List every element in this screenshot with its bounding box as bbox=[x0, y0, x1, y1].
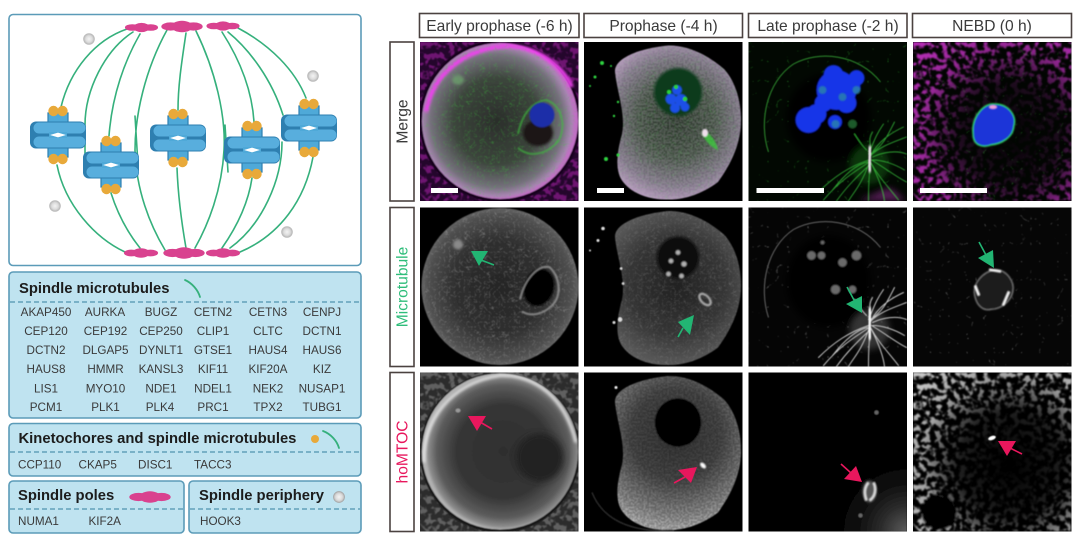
icon: microtubule bbox=[323, 431, 339, 448]
icon: microtubule bbox=[185, 280, 200, 297]
protein list: CCP110 bbox=[18, 458, 62, 472]
protein list: HMMR bbox=[87, 363, 124, 376]
image: homtoc NEBD bbox=[913, 372, 1072, 532]
protein list: TUBG1 bbox=[303, 401, 341, 414]
protein list: MYO10 bbox=[86, 382, 126, 396]
column headers bbox=[420, 14, 1072, 38]
image: homtoc late prophase bbox=[748, 372, 907, 532]
chromosomes bbox=[30, 99, 337, 194]
arrows: homtoc bbox=[468, 416, 1022, 483]
protein list: PCM1 bbox=[30, 401, 62, 414]
protein list: CETN3 bbox=[249, 306, 287, 319]
protein list: NUMA1 bbox=[18, 515, 59, 528]
protein list: HAUS4 bbox=[249, 344, 288, 357]
protein list: CEP120 bbox=[24, 325, 68, 338]
label: merge bbox=[390, 42, 414, 201]
label: homtoc: hoMTOC bbox=[394, 421, 412, 483]
protein list: HAUS6 bbox=[303, 344, 341, 357]
arrow: late prophase bbox=[846, 287, 862, 313]
row labels bbox=[390, 42, 414, 532]
protein list: KIF2A bbox=[88, 515, 121, 528]
protein list: NUSAP1 bbox=[299, 382, 345, 396]
arrow: prophase bbox=[674, 467, 697, 483]
protein list: GTSE1 bbox=[194, 344, 232, 357]
image: merge early prophase bbox=[419, 40, 581, 202]
header: late prophase bbox=[748, 14, 907, 38]
arrow: late prophase bbox=[841, 464, 862, 482]
protein list: CEP250 bbox=[139, 325, 183, 338]
panel: kinetochores and spindle microtubules bbox=[9, 424, 361, 476]
label: homtoc bbox=[390, 372, 414, 532]
image: microtubule prophase bbox=[584, 208, 742, 366]
protein list: KIF20A bbox=[249, 363, 288, 376]
protein list: DCTN1 bbox=[303, 325, 341, 338]
protein list: NDE1 bbox=[145, 382, 177, 396]
protein list: DYNLT1 bbox=[139, 344, 183, 357]
arrow: early prophase bbox=[471, 251, 494, 266]
protein list bbox=[21, 306, 345, 414]
panel: spindle poles bbox=[9, 481, 184, 533]
header: early prophase bbox=[420, 14, 579, 38]
protein list: DLGAP5 bbox=[82, 344, 129, 357]
label: microtubule: Microtubule bbox=[394, 247, 412, 327]
protein list: NEK2 bbox=[253, 382, 283, 396]
protein list: CLTC bbox=[253, 325, 283, 338]
image: microtubule early prophase bbox=[420, 208, 578, 366]
protein list: KIZ bbox=[313, 363, 331, 376]
protein list: PLK4 bbox=[146, 401, 175, 414]
scale bar bbox=[597, 188, 624, 193]
panel: spindle microtubules bbox=[9, 272, 361, 418]
protein list: LIS1 bbox=[34, 382, 58, 396]
arrow: prophase bbox=[678, 315, 694, 337]
label: merge: Merge bbox=[394, 99, 412, 144]
icon: particle bbox=[334, 492, 344, 502]
protein list: NDEL1 bbox=[194, 382, 232, 396]
protein list: TACC3 bbox=[194, 458, 231, 472]
scale bar bbox=[756, 188, 824, 193]
icon: kinetochore bbox=[311, 435, 319, 443]
header: NEBD bbox=[912, 14, 1072, 38]
protein list: AKAP450 bbox=[21, 306, 72, 319]
image: homtoc early prophase bbox=[420, 372, 580, 532]
header: NEBD: NEBD (0 h) bbox=[952, 18, 1032, 35]
protein list: HAUS8 bbox=[27, 363, 65, 376]
label: microtubule bbox=[390, 208, 414, 366]
scale bar bbox=[431, 188, 458, 193]
header: prophase: Prophase (-4 h) bbox=[609, 18, 718, 35]
protein list: BUGZ bbox=[145, 306, 177, 319]
protein list: CKAP5 bbox=[78, 458, 117, 472]
heading: Spindle microtubules bbox=[19, 281, 169, 297]
header: prophase bbox=[584, 14, 742, 38]
header: early prophase: Early prophase (-6 h) bbox=[426, 18, 573, 35]
image: merge NEBD bbox=[913, 42, 1072, 201]
protein list: CETN2 bbox=[194, 306, 232, 319]
protein list: PLK1 bbox=[91, 401, 120, 414]
heading: Kinetochores and spindle microtubules bbox=[18, 431, 296, 447]
spindle poles bbox=[124, 21, 240, 259]
image: homtoc prophase bbox=[584, 372, 742, 532]
protein list: HOOK3 bbox=[200, 515, 241, 528]
arrow: NEBD bbox=[978, 242, 994, 268]
protein list: PRC1 bbox=[197, 401, 229, 414]
protein list: CLIP1 bbox=[197, 325, 229, 338]
protein list: KIF11 bbox=[198, 363, 228, 376]
image: microtubule NEBD bbox=[913, 208, 1072, 366]
icon: pole bbox=[129, 491, 171, 503]
protein list: CEP192 bbox=[84, 325, 127, 338]
image: merge late prophase bbox=[748, 42, 907, 201]
header: late prophase: Late prophase (-2 h) bbox=[757, 18, 899, 35]
protein list: TPX2 bbox=[253, 401, 283, 414]
protein list: DCTN2 bbox=[27, 344, 65, 357]
protein list: AURKA bbox=[85, 306, 125, 319]
arrow: early prophase bbox=[468, 416, 492, 431]
image: microtubule late prophase bbox=[748, 208, 907, 366]
heading: Spindle periphery bbox=[199, 488, 325, 504]
heading: Spindle poles bbox=[18, 488, 114, 504]
scale bar bbox=[920, 188, 987, 193]
arrows: microtubule bbox=[471, 242, 994, 337]
panel: spindle periphery bbox=[189, 481, 361, 533]
arrow: NEBD bbox=[998, 441, 1022, 456]
microtubules bbox=[57, 28, 313, 252]
protein list: KANSL3 bbox=[139, 363, 183, 376]
protein list: CENPJ bbox=[303, 306, 341, 319]
image: merge prophase bbox=[584, 42, 742, 201]
periphery particles bbox=[50, 34, 318, 238]
protein list: DISC1 bbox=[138, 458, 172, 472]
panel: spindle diagram bbox=[9, 14, 361, 266]
